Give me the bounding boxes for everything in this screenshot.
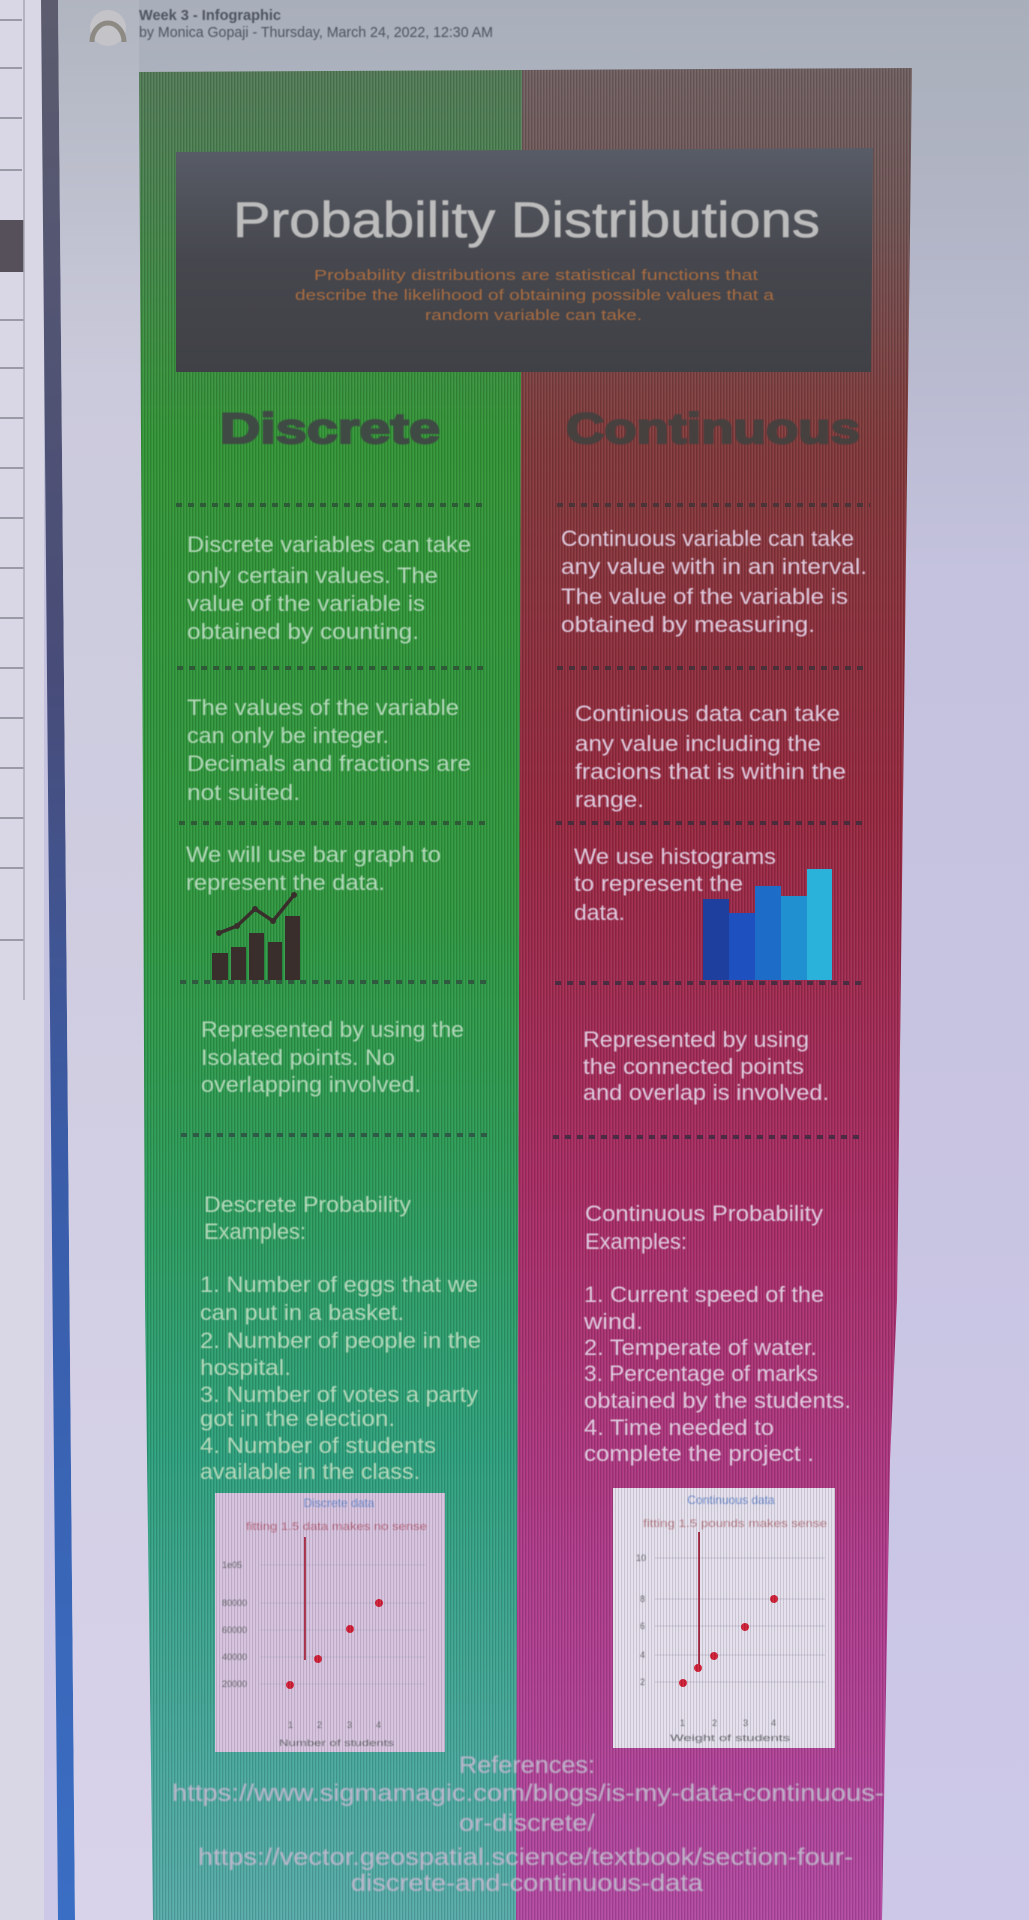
post title: Week 3 - Infographic [139, 7, 281, 24]
intro text: describe the likelihood of obtaining possible values that a [295, 287, 775, 304]
text: discrete examples: available in the class. [200, 1459, 420, 1484]
panel: discrete column background [139, 70, 522, 1920]
text: continuous definition [561, 526, 867, 637]
text: discrete examples: got in the election. [200, 1406, 395, 1431]
text: continuous definition: any value with in an interval. [561, 554, 867, 579]
chart: discrete data scatter: 40000 [222, 1652, 247, 1662]
text: continuous values: any value including the [575, 731, 821, 756]
text: continuous examples: obtained by the students. [584, 1388, 851, 1413]
chart subtitle: fitting 1.5 data makes no sense [246, 1521, 427, 1533]
text: references: https://www.sigmamagic.com/blogs/is-my-data-continuous- [172, 1780, 884, 1807]
chart: discrete data scatter [215, 1493, 445, 1752]
text: discrete definition [187, 532, 471, 644]
text: continuous examples: 4. Time needed to [584, 1415, 774, 1440]
chart: discrete data scatter: 2 [317, 1720, 322, 1730]
text: continuous values: Continious data can take [575, 701, 840, 726]
chart: discrete data scatter: 3 [347, 1720, 352, 1730]
text: continuous definition: Continuous variable can take [561, 526, 854, 551]
text: references: https://vector.geospatial.science/textbook/section-four- [198, 1844, 853, 1871]
scan lines over charts [215, 1488, 835, 1752]
text: discrete examples: hospital. [200, 1355, 291, 1380]
text: discrete examples: Descrete Probability [204, 1192, 411, 1217]
text: discrete values: not suited. [187, 780, 300, 805]
chart: continuous data scatter: 3 [743, 1718, 748, 1728]
text: discrete representation: Isolated points. No [201, 1045, 395, 1070]
text: discrete examples [200, 1192, 481, 1484]
icon: avatar [90, 10, 126, 46]
chart: discrete data scatter: 1e05 [222, 1560, 242, 1570]
chart: continuous data scatter [613, 1488, 835, 1748]
chart: discrete data scatter: 80000 [222, 1598, 247, 1608]
icon: bar graph with trend line [212, 892, 300, 980]
text: continuous definition: obtained by measuring. [561, 612, 815, 637]
text: continuous examples: complete the project . [584, 1441, 814, 1466]
panel: title banner [176, 148, 873, 372]
intro text: Probability distributions are statistical functions that [314, 267, 759, 284]
chart: continuous data scatter: 6 [640, 1621, 645, 1631]
text: discrete examples: 1. Number of eggs that we [200, 1272, 478, 1297]
chart: continuous data scatter: 4 [771, 1718, 776, 1728]
intro text: random variable can take. [425, 307, 642, 324]
text: discrete representation: overlapping involved. [201, 1072, 421, 1097]
title: Probability Distributions [233, 192, 820, 248]
text: discrete definition: obtained by counting. [187, 619, 419, 644]
text: discrete graph type [186, 842, 441, 895]
text: references: or-discrete/ [459, 1810, 595, 1837]
text: references: discrete-and-continuous-data [351, 1870, 704, 1897]
chart: continuous data scatter: 4 [640, 1650, 645, 1660]
chart: discrete data scatter: 20000 [222, 1679, 247, 1689]
screen scan lines [139, 68, 912, 1920]
panel: continuous column background [516, 68, 912, 1920]
text: discrete examples: Examples: [204, 1219, 306, 1244]
heading: discrete: Discrete [220, 405, 440, 453]
text: references: References: [459, 1752, 595, 1779]
text: continuous representation: the connected points [583, 1054, 804, 1079]
chart: discrete data scatter: 1 [288, 1720, 293, 1730]
chart: discrete data scatter: Number of students [279, 1738, 395, 1748]
text: continuous examples: 3. Percentage of marks [584, 1361, 818, 1386]
text: references [172, 1752, 884, 1897]
chart subtitle: fitting 1.5 pounds makes sense [643, 1518, 827, 1530]
chart: continuous data scatter: 2 [640, 1677, 645, 1687]
heading: continuous: Continuous [566, 405, 860, 453]
text: discrete representation [201, 1017, 464, 1097]
text: continuous representation: and overlap is involved. [583, 1080, 829, 1105]
text: discrete graph type: We will use bar graph to [186, 842, 441, 867]
text: discrete definition: only certain values. The [187, 563, 438, 588]
icon: histogram [703, 869, 832, 980]
text: discrete examples: 2. Number of people in the [200, 1328, 481, 1353]
chart: discrete data scatter: 60000 [222, 1625, 247, 1635]
left sidebar table [0, 0, 44, 1920]
text: continuous examples: Continuous Probability [585, 1201, 823, 1226]
sidebar vertical bar [41, 0, 75, 1920]
text: discrete examples: 4. Number of students [200, 1433, 436, 1458]
text: discrete definition: Discrete variables can take [187, 532, 471, 557]
text: continuous graph type: data. [574, 900, 625, 925]
chart title: Continuous data [687, 1493, 775, 1507]
text: continuous graph type: We use histograms [574, 844, 776, 869]
text: continuous examples [583, 1201, 851, 1466]
text: discrete definition: value of the variable is [187, 591, 425, 616]
text: continuous examples: 2. Temperate of water. [584, 1335, 817, 1360]
text: discrete values: The values of the variable [187, 695, 459, 720]
text: continuous graph type [574, 844, 776, 925]
text: discrete examples: 3. Number of votes a party [200, 1382, 478, 1407]
post header [90, 7, 493, 46]
text: continuous examples: wind. [583, 1309, 643, 1334]
text: discrete graph type: represent the data. [186, 870, 385, 895]
text: continuous values: fracions that is within the [575, 759, 846, 784]
text: discrete examples: can put in a basket. [200, 1300, 404, 1325]
content gutter [58, 0, 153, 1920]
chart: continuous data scatter: 8 [640, 1594, 645, 1604]
text: continuous definition: The value of the variable is [561, 584, 848, 609]
text: continuous graph type: to represent the [574, 871, 743, 896]
text: continuous examples: 1. Current speed of the [584, 1282, 824, 1307]
chart: continuous data scatter: Weight of students [670, 1733, 791, 1743]
text: discrete values: can only be integer. [187, 723, 389, 748]
chart: discrete data scatter: 4 [376, 1720, 381, 1730]
text: continuous values [575, 701, 846, 812]
text: continuous representation [583, 1027, 829, 1105]
intro text [295, 267, 775, 324]
text: discrete values [187, 695, 471, 805]
chart: continuous data scatter: 2 [712, 1718, 717, 1728]
chart title: Discrete data [304, 1496, 375, 1510]
text: discrete values: Decimals and fractions are [187, 751, 471, 776]
text: continuous examples: Examples: [585, 1229, 687, 1254]
chart: continuous data scatter: 10 [636, 1553, 646, 1563]
text: continuous representation: Represented by using [583, 1027, 809, 1052]
text: discrete representation: Represented by using the [201, 1017, 464, 1042]
chart: continuous data scatter: 1 [680, 1718, 685, 1728]
text: continuous values: range. [575, 787, 644, 812]
post byline: by Monica Gopaji - Thursday, March 24, 2022, 12:30 AM [139, 24, 493, 41]
